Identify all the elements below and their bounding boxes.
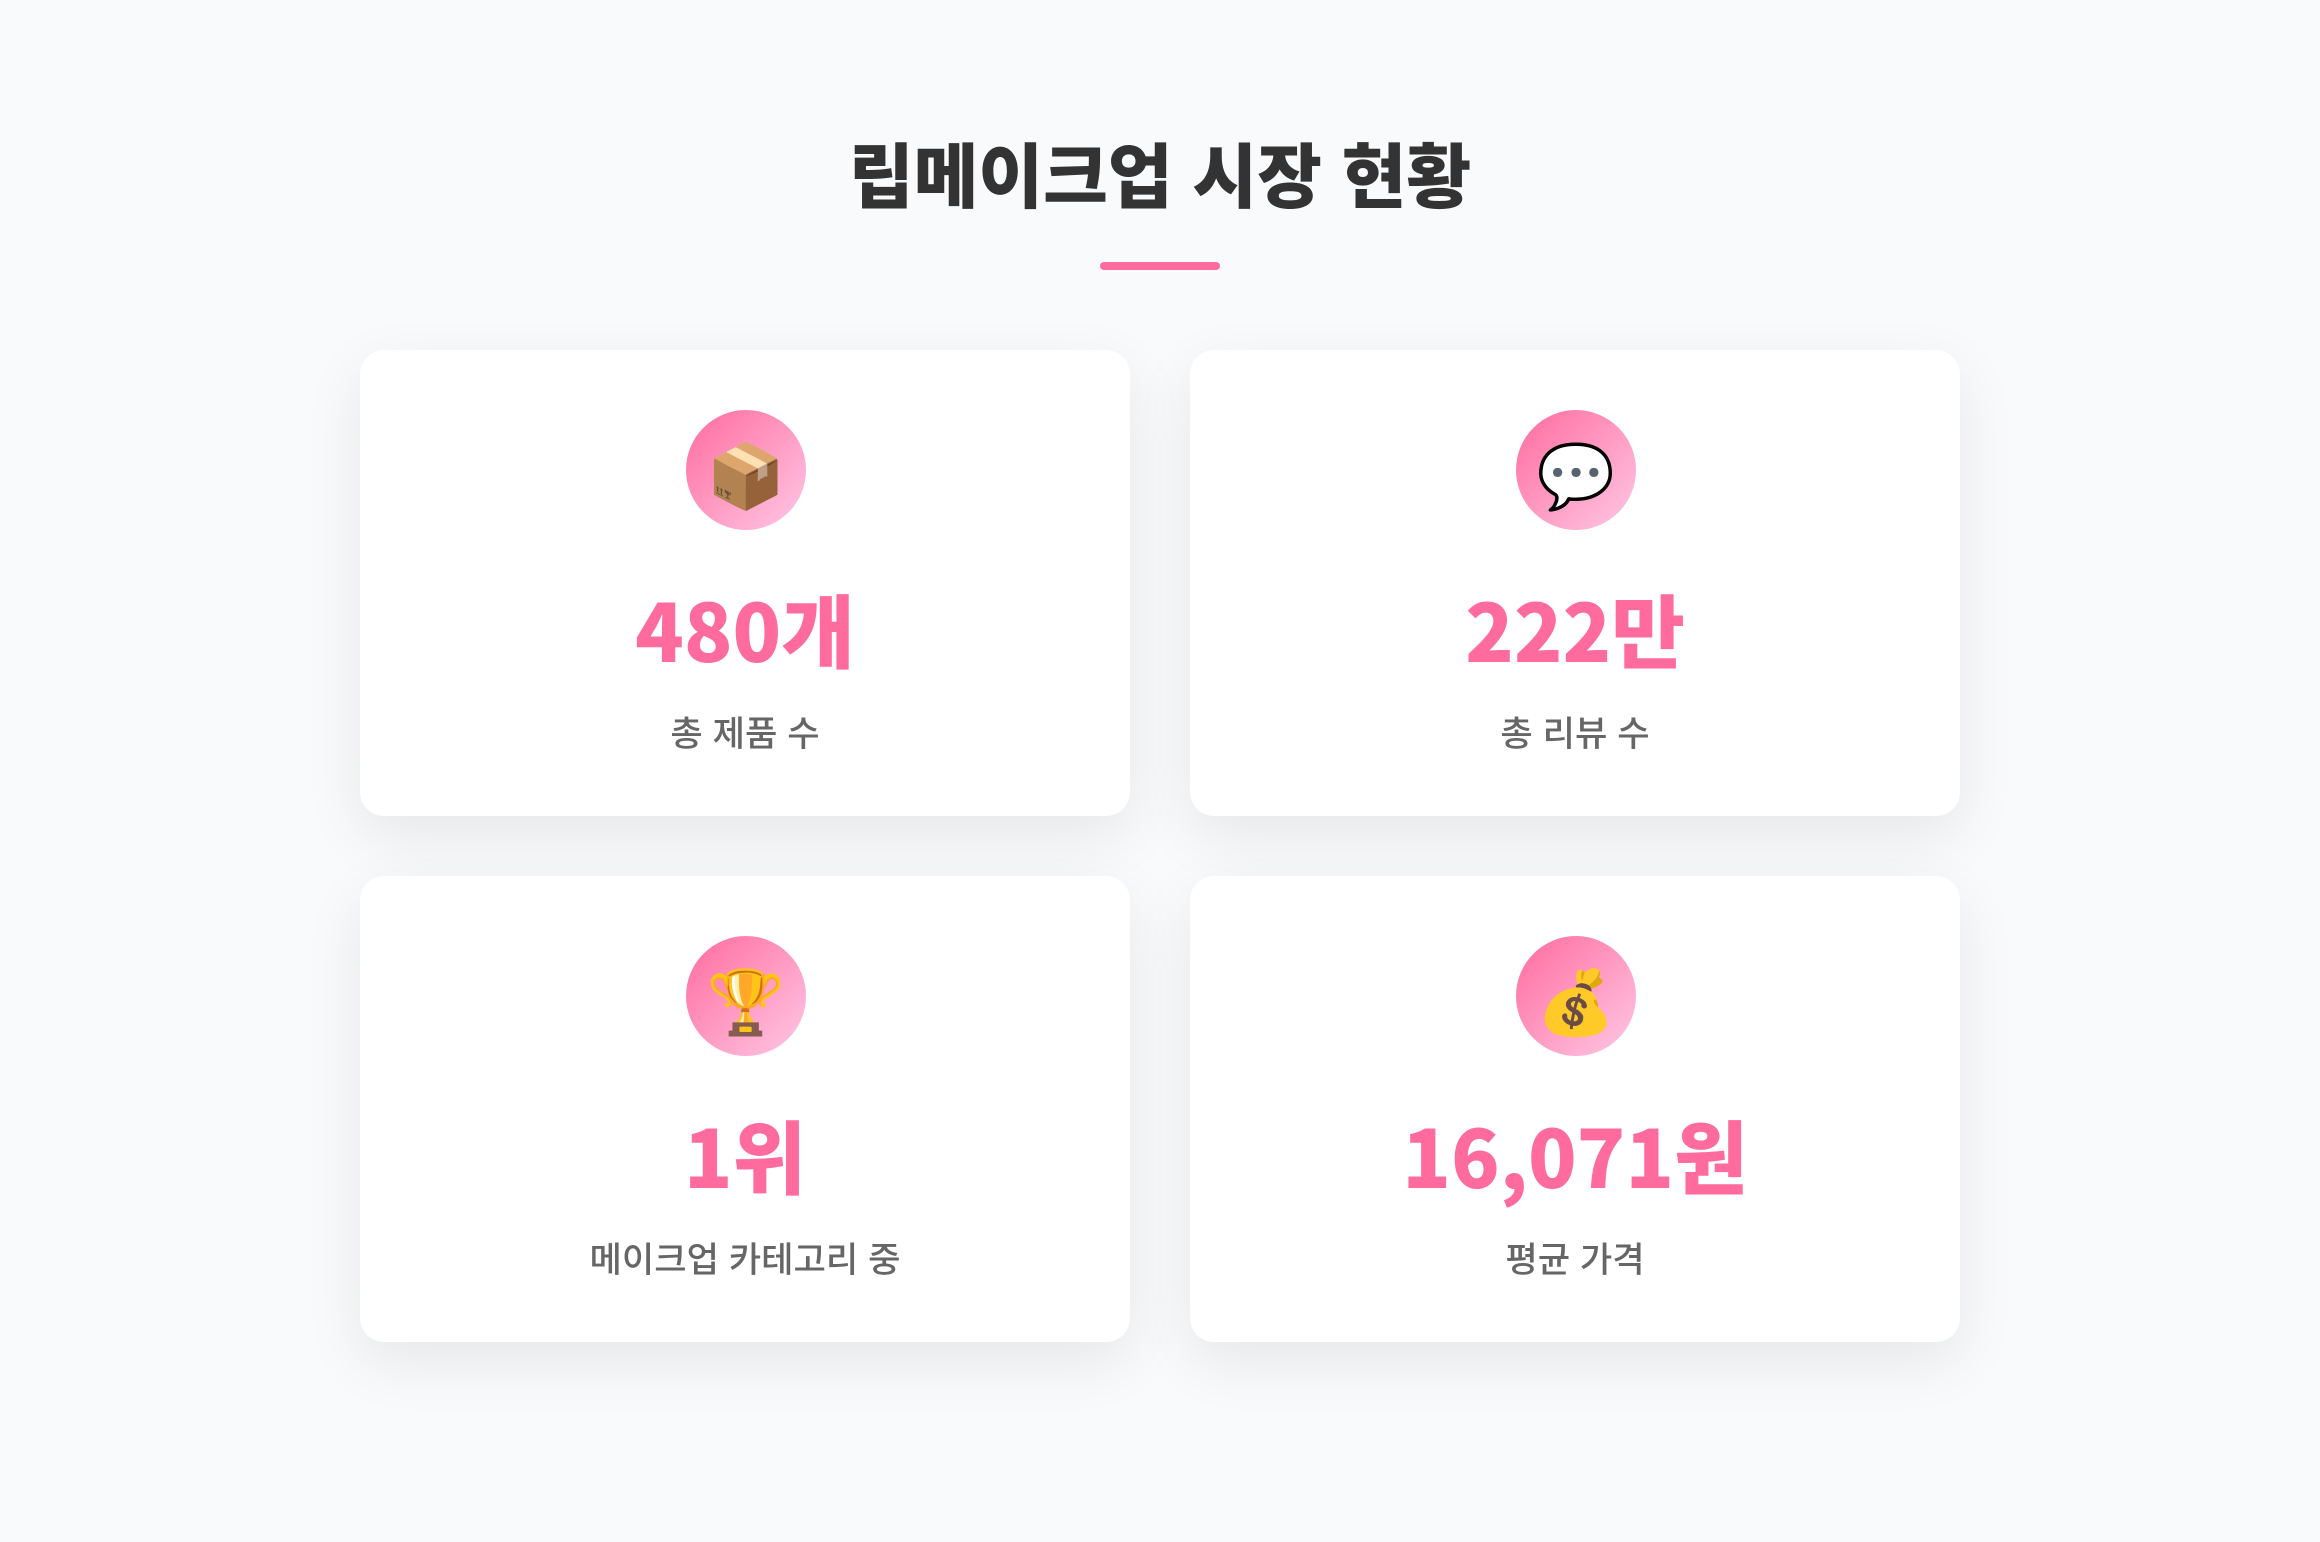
icon: money bag: 💰 — [1537, 966, 1615, 1040]
title: 립메이크업 시장 현황 — [849, 121, 1471, 223]
stat label: 평균 가격: 평균 가격 — [1505, 1232, 1645, 1283]
icon: package — [686, 410, 806, 530]
icon: speech bubble: 💬 — [1537, 440, 1615, 514]
icon: trophy — [686, 936, 806, 1056]
stat value: 16,071원: 16,071원 — [1402, 1096, 1748, 1212]
panel: total products — [360, 350, 1130, 816]
stat label: 총 제품 수: 총 제품 수 — [670, 706, 820, 757]
stat label: 메이크업 카테고리 중: 메이크업 카테고리 중 — [589, 1232, 901, 1283]
stat value: 222만: 222만 — [1465, 570, 1685, 686]
icon: trophy: 🏆 — [707, 966, 785, 1040]
panel: category rank — [360, 876, 1130, 1342]
icon: money bag — [1516, 936, 1636, 1056]
stat value: 480개: 480개 — [635, 570, 855, 686]
icon: package: 📦 — [707, 440, 785, 514]
title underline — [1100, 262, 1220, 270]
panel: total reviews — [1190, 350, 1960, 816]
stat value: 1위: 1위 — [684, 1096, 806, 1212]
stat label: 총 리뷰 수: 총 리뷰 수 — [1500, 706, 1650, 757]
icon: speech bubble — [1516, 410, 1636, 530]
panel: average price — [1190, 876, 1960, 1342]
